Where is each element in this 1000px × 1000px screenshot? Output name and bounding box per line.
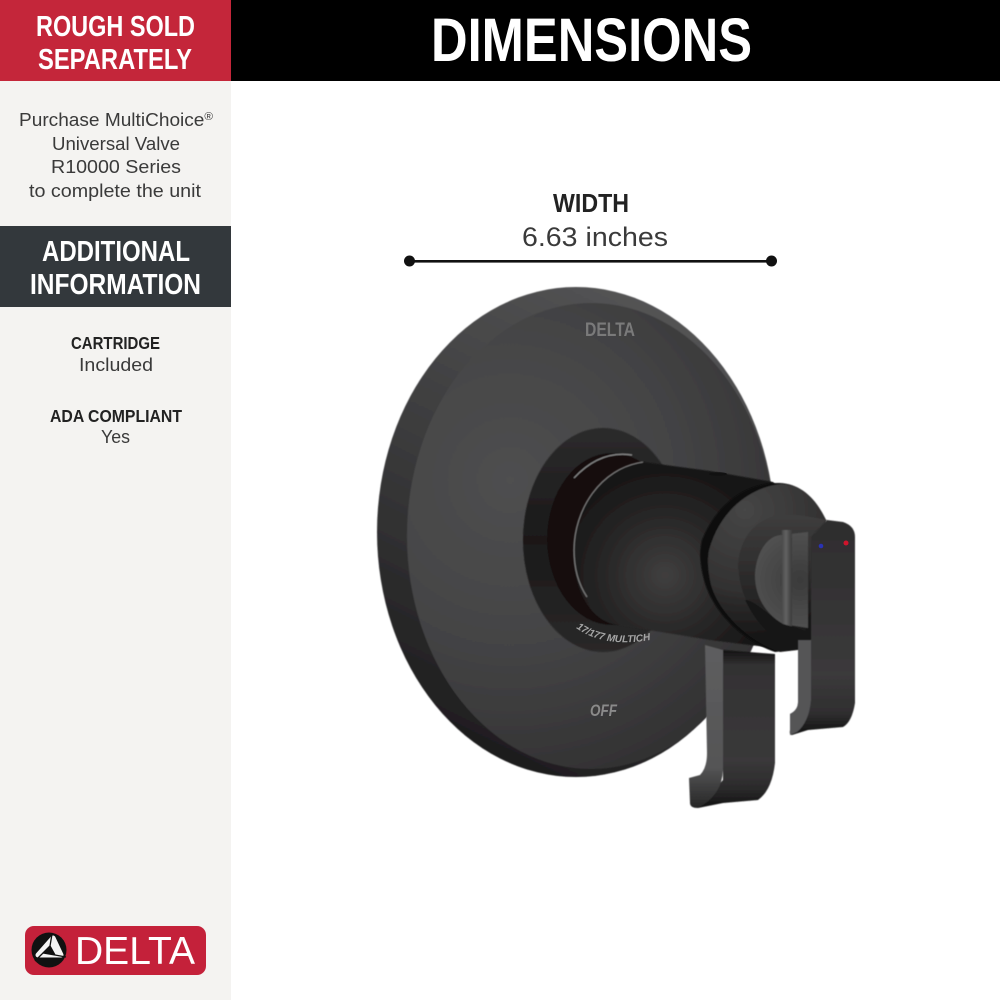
logo: delta: DELTA — [75, 930, 195, 973]
right lever handle — [790, 520, 855, 735]
text block: cartridge — [71, 333, 160, 375]
ring engraving: 17/177 MULTICHOICE — [576, 624, 650, 642]
text block: cartridge: Included — [79, 355, 153, 375]
text block: cartridge: CARTRIDGE — [71, 333, 160, 353]
text block: ada compliant — [50, 406, 182, 447]
handle collar — [700, 483, 827, 652]
panel: rough sold separately banner: SEPARATELY — [38, 44, 192, 76]
cylinder body — [573, 462, 790, 650]
title bar — [231, 0, 1000, 81]
text block: purchase note: Purchase MultiChoice — [19, 110, 194, 130]
text block: purchase note — [19, 110, 213, 201]
plate text: delta: DELTA — [585, 320, 635, 341]
panel: rough sold separately banner: ROUGH SOLD — [36, 11, 195, 43]
title bar: DIMENSIONS — [431, 6, 752, 74]
panel: sidebar — [0, 0, 231, 1000]
text block: purchase note: ® — [204, 111, 213, 123]
text block: purchase note: to complete the unit — [29, 181, 201, 201]
logo: delta — [25, 926, 206, 975]
arrow: width line — [404, 256, 777, 266]
text block: purchase note: R10000 Series — [51, 157, 181, 177]
text block: purchase note: Universal Valve — [52, 134, 180, 154]
width dimension: 6.63 inches — [522, 222, 668, 252]
text block: ada compliant: ADA COMPLIANT — [50, 406, 182, 426]
width dimension: WIDTH — [553, 188, 629, 218]
text block: ada compliant: Yes — [101, 427, 130, 447]
plate text: off: OFF — [590, 701, 617, 720]
panel: additional information banner — [0, 226, 231, 307]
center ring — [523, 428, 683, 652]
left lever handle — [689, 645, 775, 808]
panel: rough sold separately banner — [0, 0, 231, 81]
small pin on cylinder — [709, 472, 727, 476]
red and blue indicators — [819, 540, 848, 548]
width dimension — [404, 188, 777, 266]
escutcheon plate — [377, 287, 775, 777]
panel: additional information banner: ADDITIONAL — [42, 236, 190, 268]
panel: additional information banner: INFORMATION — [30, 269, 201, 301]
product: valve trim — [376, 286, 856, 809]
